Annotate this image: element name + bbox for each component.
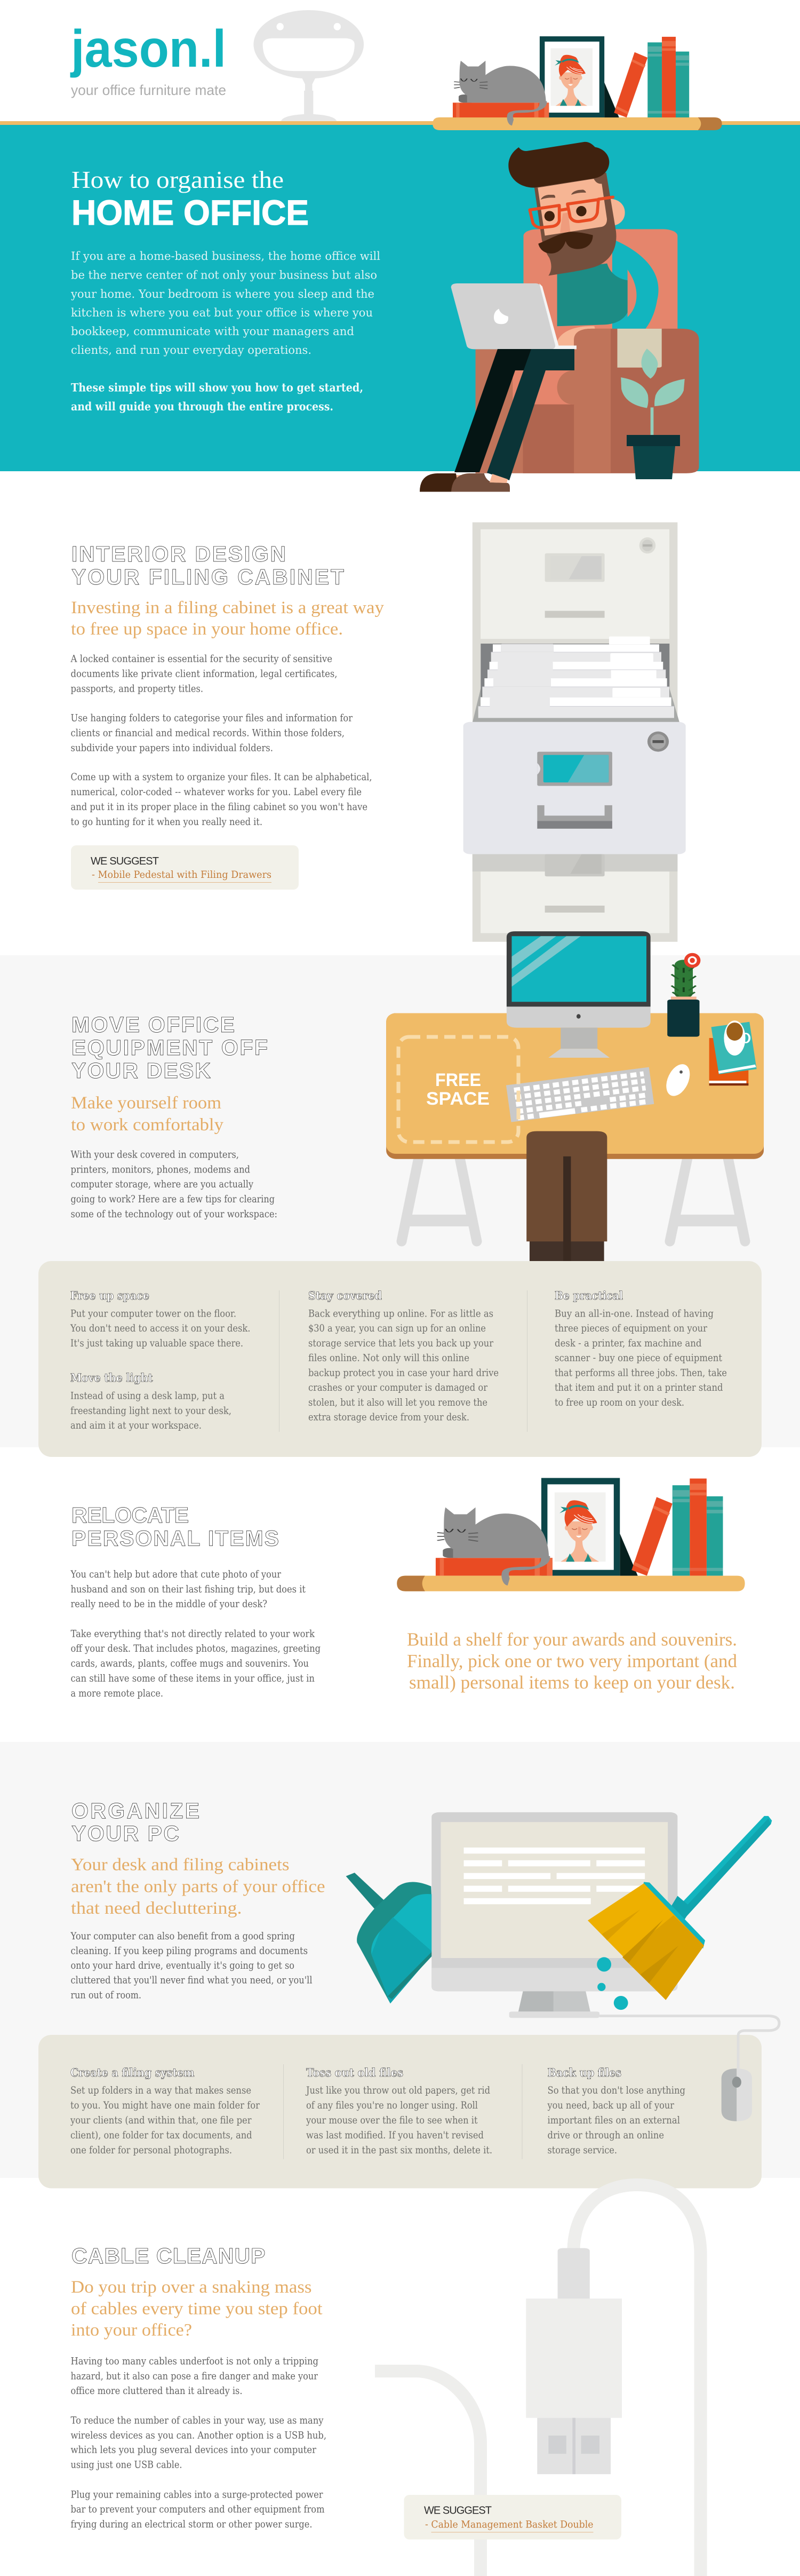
text block: cable cleanup: To reduce the number of cables in your way, use as many: [70, 2415, 324, 2427]
tip: stay covered: stolen, but it also will let you remove the: [308, 1397, 487, 1408]
text block: filing cabinet tips: subdivide your papers into individual folders.: [70, 743, 273, 754]
tip: be practical: scanner - buy one piece of equipment: [555, 1352, 722, 1364]
panel: grey desk section background: [0, 955, 800, 1447]
subheading: your desk and filing cabinets: that need decluttering.: [71, 1899, 242, 1918]
torso: [557, 264, 628, 326]
computer mouse: [722, 2068, 752, 2121]
tip: create a filing system: your clients (and within that, one file per: [70, 2115, 252, 2126]
text block: cable cleanup: hazard, but it also can pose a fire danger and make your: [70, 2371, 318, 2382]
title: how to organise the home office: How to organise the: [71, 166, 284, 193]
heading: move office equipment off your desk: [71, 1012, 268, 1083]
tip: toss out old files: your mouse over the file to see when it: [306, 2115, 478, 2126]
text block: personal items: off your desk. That includes photos, magazines, greeting: [70, 1643, 321, 1654]
shirt sleeve: [612, 239, 659, 331]
tip: create a filing system: Set up folders in a way that makes sense: [70, 2085, 251, 2096]
cloth: [617, 329, 662, 368]
chair back: [523, 229, 677, 358]
callout: we suggest cable basket: [404, 2495, 621, 2539]
chair seat left: [476, 349, 578, 473]
illustration: header shelf: [433, 36, 722, 130]
callout: we suggest cable basket: WE SUGGEST: [424, 2505, 492, 2517]
heading: move office equipment off your desk: YOUR DESK: [71, 1058, 211, 1083]
tip: be practical: three pieces of equipment on your: [555, 1323, 707, 1334]
tip: free up space: Free up space: [70, 1289, 149, 1302]
tip: move the light: freestanding light next to your desk,: [70, 1406, 231, 1416]
header shelf items: [453, 36, 689, 125]
shoes: [420, 473, 510, 492]
text block: hero intro: bookkeep, communicate with your managers and: [71, 325, 354, 338]
text block: filing cabinet tips: documents like private client information, legal certificates,: [70, 668, 337, 680]
tip: toss out old files: of any files you're no longer using. Roll: [306, 2100, 478, 2111]
cables: [375, 2185, 701, 2576]
text block: personal items: cards, awards, plants, coffee mugs and souvenirs. You: [70, 1658, 309, 1669]
text block: desk intro: some of the technology out of your workspace:: [70, 1209, 277, 1220]
tip: free up space: You don't need to access it on your desk.: [70, 1323, 251, 1334]
text block: hero intro: clients, and run your everyday operations.: [71, 344, 311, 356]
mouse: [662, 1063, 694, 1097]
heading: cable cleanup: CABLE CLEANUP: [71, 2244, 266, 2268]
quote: build a shelf: [407, 1629, 737, 1693]
tip: move the light: and aim it at your workspace.: [70, 1420, 202, 1431]
text block: organize pc: cleaning. If you keep piling programs and documents: [70, 1946, 308, 1956]
picture frame: [541, 1478, 638, 1576]
tip: be practical: [555, 1289, 727, 1408]
text block: hero intro: kitchen is where you eat but your office is where you: [71, 306, 373, 319]
panel: hero teal background: [0, 125, 800, 471]
mouse cable: [599, 2016, 779, 2068]
tip: back up files: [547, 2066, 685, 2156]
dust dots: [597, 1957, 628, 2010]
tip: create a filing system: client), one folder for tax documents, and: [70, 2130, 252, 2141]
tip: back up files: drive or through an online: [547, 2130, 664, 2141]
tip: free up space: [70, 1289, 251, 1349]
illustration: filing cabinet: [463, 522, 686, 942]
text block: filing cabinet tips: to go hunting for it when you really need it.: [70, 817, 262, 828]
heading: relocate personal items: PERSONAL ITEMS: [71, 1526, 279, 1551]
text block: cable cleanup: Having too many cables underfoot is not only a tripping: [70, 2356, 318, 2367]
tip: stay covered: crashes or your computer is damaged or: [308, 1382, 487, 1393]
heading: relocate personal items: [71, 1503, 279, 1551]
tip: toss out old files: was last modified. If you haven't revised: [306, 2130, 484, 2141]
text block: desk intro: [70, 1149, 277, 1220]
text block: cable cleanup: frying during an electrical storm or other power surge.: [70, 2519, 313, 2530]
text: free space: SPACE: [426, 1089, 490, 1109]
subheading: your desk and filing cabinets: [71, 1856, 325, 1918]
text block: filing cabinet tips: clients or financial and medical records. Within those folders,: [70, 728, 345, 739]
title: how to organise the home office: HOME OFFICE: [71, 193, 309, 232]
subheading: make yourself room: to work comfortably: [71, 1115, 224, 1135]
text block: filing cabinet tips: numerical, color-coded -- whatever works for you. Label every file: [70, 787, 362, 798]
monitor: [507, 931, 651, 1058]
illustration: desk with free space: [386, 931, 764, 1262]
text block: personal items: You can't help but adore that cute photo of your: [70, 1569, 281, 1580]
tip: stay covered: $30 a year, you can sign up for an online: [308, 1323, 486, 1334]
subheading: investing in a filing cabinet: [71, 598, 385, 639]
wooden shelf: [397, 1576, 745, 1591]
quote: build a shelf: Finally, pick one or two very important (and: [407, 1651, 737, 1671]
heading: interior design your filing cabinet: YOUR FILING CABINET: [71, 565, 344, 589]
row of books: [673, 1479, 723, 1576]
head with beard and glasses: [508, 142, 625, 276]
flower pot: [627, 435, 680, 479]
text block: filing cabinet tips: [70, 653, 372, 828]
chair seat front: [523, 405, 579, 473]
text block: cable cleanup: [70, 2356, 326, 2530]
front drawer: [463, 722, 686, 854]
tip: be practical: Be practical: [555, 1289, 623, 1302]
text block: cable cleanup: Plug your remaining cables into a surge-protected power: [70, 2489, 323, 2500]
text block: desk intro: computer storage, where are you actually: [70, 1179, 253, 1190]
illustration: computer, dustpan and broom: [346, 1812, 779, 2121]
hand: [556, 326, 599, 346]
books and coffee mug: [709, 1020, 757, 1085]
leaning book: [631, 1497, 673, 1576]
tip: toss out old files: Toss out old files: [306, 2066, 403, 2079]
tip: move the light: Instead of using a desk lamp, put a: [70, 1391, 225, 1402]
tip: back up files: you need, back up all of your: [547, 2100, 674, 2111]
top drawer: [481, 529, 669, 639]
right arm of chair: [557, 329, 699, 473]
heading: interior design your filing cabinet: [71, 542, 344, 589]
plant: [621, 348, 685, 435]
tip: create a filing system: to you. You might have one main folder for: [70, 2100, 260, 2111]
text block: hero intro: your home. Your bedroom is where you sleep and the: [70, 288, 374, 300]
heading: relocate personal items: RELOCATE: [71, 1503, 189, 1527]
tip: create a filing system: Create a filing system: [70, 2066, 194, 2079]
heading: organize your pc: ORGANIZE: [71, 1798, 199, 1823]
desk legs: [402, 1155, 745, 1241]
text: free space: [426, 1070, 490, 1109]
keyboard: [506, 1067, 654, 1122]
subheading: investing in a filing cabinet: to free up space in your home office.: [71, 620, 343, 639]
inner arm: [628, 270, 636, 317]
orange shelf strip: [0, 121, 800, 125]
tip: create a filing system: one folder for personal photographs.: [70, 2145, 232, 2156]
text block: personal items: really need to be in the middle of your desk?: [70, 1599, 267, 1610]
text block: personal items: a more remote place.: [70, 1688, 163, 1699]
broom: [588, 1816, 772, 2000]
text block: personal items: [70, 1569, 321, 1699]
desk top: [386, 1013, 764, 1159]
panel: grey PC section background: [0, 1742, 800, 2178]
callout: we suggest cable basket: - Cable Management Basket Double: [425, 2519, 594, 2530]
illustration: man with laptop in armchair: [420, 142, 699, 492]
tip: toss out old files: or used it in the past six months, delete it.: [306, 2145, 492, 2156]
bottom drawer: [481, 871, 669, 933]
heading: interior design your filing cabinet: INTERIOR DESIGN: [71, 542, 286, 566]
subheading: your desk and filing cabinets: aren't the only parts of your office: [71, 1877, 325, 1896]
cabinet frame: [473, 522, 677, 942]
text: free space: FREE: [435, 1070, 481, 1090]
sleeping cat: [437, 1508, 550, 1586]
text block: cable cleanup: bar to prevent your computers and other equipment from: [70, 2504, 325, 2515]
tip: toss out old files: [305, 2066, 492, 2156]
text block: personal items: husband and son on their last fishing trip, but does it: [70, 1584, 306, 1595]
tip: move the light: [70, 1371, 231, 1431]
tip: free up space: Put your computer tower on the floor.: [70, 1308, 236, 1319]
subheading: make yourself room: Make yourself room: [71, 1093, 221, 1113]
tip: stay covered: files online. Not only will this online: [308, 1352, 469, 1364]
tip: be practical: to free up room on your desk.: [555, 1397, 684, 1408]
text block: hero intro: If you are a home-based business, the home office will: [71, 250, 380, 263]
subheading: snaking mass of cables: of cables every time you step foot: [71, 2299, 322, 2318]
heading: move office equipment off your desk: MOVE OFFICE: [71, 1012, 235, 1037]
text block: hero intro: These simple tips will show you how to get started,: [71, 381, 363, 394]
tip: back up files: storage service.: [547, 2145, 617, 2156]
text block: hero intro: [70, 250, 380, 413]
hanging folders: [473, 637, 679, 722]
panel: desk tips: [38, 1261, 762, 1457]
logo: jason.l: jason.l: [70, 19, 226, 78]
cactus: [667, 953, 700, 1037]
tip: be practical: that item and put it on a printer stand: [555, 1382, 723, 1393]
callout: we suggest mobile pedestal: WE SUGGEST: [91, 855, 159, 867]
heading: organize your pc: [71, 1798, 199, 1845]
illustration: shelf with cat, photo and books: [397, 1478, 745, 1591]
tip: back up files: So that you don't lose anything: [547, 2085, 685, 2096]
text block: cable cleanup: which lets you plug several devices into your computer: [70, 2445, 316, 2456]
tip: move the light: Move the light: [70, 1371, 153, 1384]
subheading: investing in a filing cabinet: Investing in a filing cabinet is a great way: [71, 598, 385, 617]
tip: back up files: important files on an external: [547, 2115, 680, 2126]
text block: hero intro: and will guide you through the entire process.: [71, 400, 333, 413]
illustration: usb cable: [375, 2185, 701, 2576]
red book: [436, 1558, 553, 1576]
text block: desk intro: printers, monitors, phones, modems and: [70, 1164, 250, 1175]
subheading: snaking mass of cables: Do you trip over a snaking mass: [71, 2278, 311, 2297]
panel: pc tips: [38, 2035, 762, 2188]
tip: stay covered: extra storage device from your desk.: [308, 1412, 469, 1423]
tip: stay covered: backup protect you in case your hard drive: [308, 1367, 499, 1378]
tip: be practical: Buy an all-in-one. Instead of having: [555, 1308, 714, 1319]
text block: organize pc: [70, 1931, 313, 2001]
text block: filing cabinet tips: and put it in its proper place in the filing cabinet so you won't have: [70, 802, 367, 813]
tip: stay covered: Back everything up online. For as little as: [308, 1308, 493, 1319]
text block: cable cleanup: wireless devices as you can. Another option is a USB hub,: [70, 2430, 326, 2441]
subheading: snaking mass of cables: into your office?: [71, 2321, 192, 2340]
callout: we suggest mobile pedestal: - Mobile Pedestal with Filing Drawers: [92, 869, 271, 881]
heading: move office equipment off your desk: EQUIPMENT OFF: [71, 1035, 268, 1060]
icon: egg chair: [253, 10, 364, 121]
text block: personal items: Take everything that's not directly related to your work: [70, 1628, 315, 1639]
logo: jason.l: your office furniture mate: [71, 82, 226, 98]
tip: create a filing system: [70, 2066, 260, 2156]
tip: toss out old files: Just like you throw out old papers, get rid: [305, 2085, 490, 2096]
title: how to organise the home office: [71, 166, 309, 232]
text block: organize pc: cluttered that you'll never find what you need, or you'll: [70, 1975, 313, 1986]
text block: desk intro: going to work? Here are a few tips for clearing: [70, 1194, 275, 1205]
text block: hero intro: be the nerve center of not only your business but also: [71, 268, 377, 281]
text block: cable cleanup: office more cluttered than it already is.: [70, 2385, 242, 2397]
text block: organize pc: run out of room.: [70, 1990, 141, 2001]
seat cushion: [513, 371, 577, 405]
legs and trousers: [526, 1131, 607, 1262]
subheading: snaking mass of cables: [71, 2278, 322, 2340]
text block: personal items: can still have some of these items in your office, just in: [70, 1673, 315, 1684]
pant legs: [454, 349, 574, 480]
tip: stay covered: Stay covered: [308, 1289, 382, 1302]
text block: organize pc: onto your hard drive, eventually it's going to get so: [70, 1960, 294, 1971]
free space dashed outline: [398, 1037, 518, 1142]
usb plug: [526, 2248, 622, 2474]
quote: build a shelf: Build a shelf for your awards and souvenirs.: [407, 1629, 737, 1650]
text block: filing cabinet tips: Use hanging folders to categorise your files and information for: [70, 713, 353, 724]
heading: organize your pc: YOUR PC: [71, 1821, 179, 1845]
dustpan: [346, 1873, 434, 2003]
text block: organize pc: Your computer can also benefit from a good spring: [70, 1931, 295, 1942]
subheading: your desk and filing cabinets: Your desk and filing cabinets: [71, 1856, 289, 1875]
tip: stay covered: [308, 1289, 499, 1423]
subheading: make yourself room: [71, 1093, 224, 1135]
tip: be practical: that performs all three jobs. Then, take: [555, 1367, 727, 1378]
shelf items: book, cat, frame, books: [436, 1478, 723, 1586]
computer monitor: [431, 1812, 677, 2018]
tip: be practical: desk - a printer, fax machine and: [555, 1338, 702, 1349]
tip: back up files: Back up files: [547, 2066, 621, 2079]
text block: filing cabinet tips: Come up with a system to organize your files. It can be alphabetical,: [70, 772, 372, 783]
tip: free up space: It's just taking up valuable space there.: [70, 1338, 243, 1349]
text block: filing cabinet tips: A locked container is essential for the security of sensitive: [70, 653, 332, 665]
text block: desk intro: With your desk covered in computers,: [70, 1149, 239, 1160]
tip: stay covered: storage service that lets you back up your: [308, 1338, 493, 1349]
callout: we suggest mobile pedestal: [71, 845, 299, 890]
text block: filing cabinet tips: passports, and property titles.: [70, 683, 203, 695]
laptop: [451, 283, 577, 349]
quote: build a shelf: small) personal items to keep on your desk.: [409, 1672, 735, 1693]
text block: cable cleanup: using just one USB cable.: [70, 2459, 182, 2470]
